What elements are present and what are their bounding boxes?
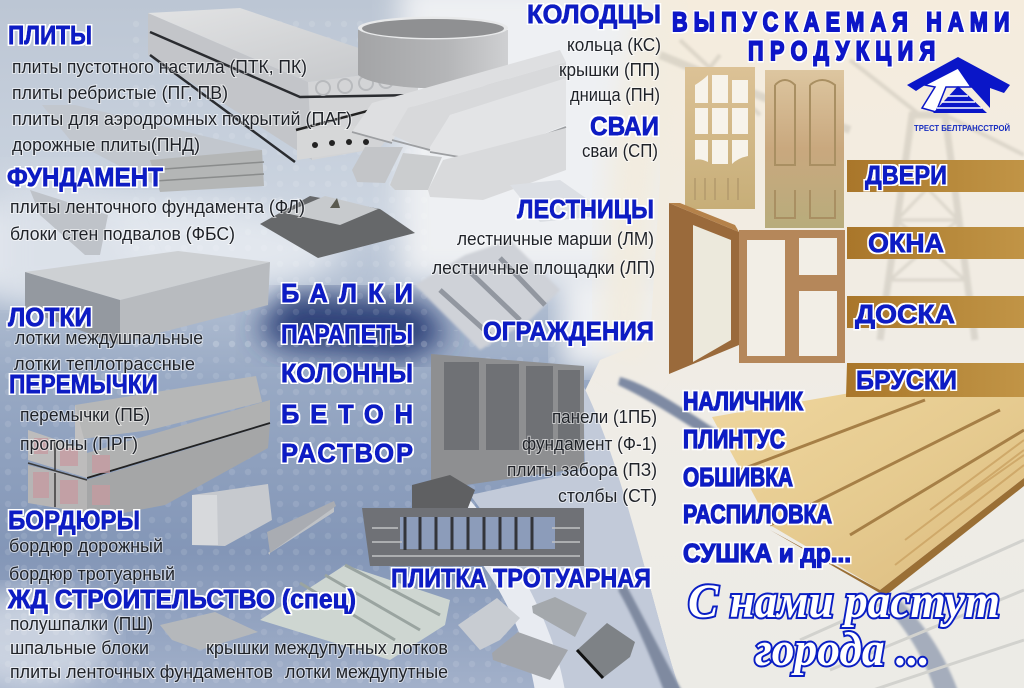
list: перемычки (ПБ) [20, 405, 150, 425]
heading: БОРДЮРЫ [8, 507, 140, 535]
image: panel door [765, 70, 844, 228]
list: плиты ленточных фундаментов [10, 662, 273, 682]
center product list: ПАРАПЕТЫ [281, 321, 413, 349]
center product list [281, 280, 413, 468]
bar: бруски: БРУСКИ [856, 367, 957, 395]
list: дорожные плиты(ПНД) [12, 135, 200, 155]
title [672, 8, 1010, 67]
bar: окна [847, 227, 1024, 259]
section: плиты [8, 22, 352, 155]
image: hollow core slabs [148, 8, 420, 162]
wood products list [683, 386, 851, 568]
heading: ОГРАЖДЕНИЯ [483, 318, 654, 346]
image: curb stones [192, 484, 336, 555]
center product list: КОЛОННЫ [281, 360, 413, 388]
list: лотки междупутные [285, 662, 448, 682]
heading: ФУНДАМЕНТ [7, 164, 163, 192]
center product list: РАСТВОР [281, 440, 413, 468]
list [14, 328, 203, 374]
list: панели (1ПБ) [552, 407, 657, 427]
section: перемычки [9, 371, 158, 454]
list: столбы (СТ) [558, 486, 657, 506]
section: лотки [8, 304, 203, 374]
bar: бруски [846, 363, 1024, 397]
section: колодцы [527, 1, 661, 105]
center product list: БЕТОН [281, 401, 413, 429]
list: лотки теплотрассные [14, 354, 195, 374]
slogan [688, 575, 1000, 676]
section: бордюры [8, 507, 175, 584]
image: lotok trough [25, 251, 270, 345]
image: foundation block [260, 196, 415, 258]
list: днища (ПН) [570, 85, 660, 105]
list: кольца (КС) [567, 35, 661, 55]
bar: двери: ДВЕРИ [865, 162, 947, 190]
section: лестницы [432, 196, 655, 278]
slogan: С нами растут [688, 575, 1000, 628]
image: stacked lintels [28, 376, 270, 520]
bar: окна: ОКНА [868, 230, 944, 258]
list [9, 536, 175, 584]
list [432, 229, 655, 278]
image: road slabs [30, 105, 264, 255]
image: concrete well ring [358, 16, 508, 88]
list: блоки стен подвалов (ФБС) [10, 224, 235, 244]
image: wooden boards [712, 393, 1024, 596]
list: прогоны (ПРГ) [20, 434, 138, 454]
heading: КОЛОДЦЫ [527, 1, 661, 29]
list [10, 197, 305, 244]
image: decorative fence [362, 508, 584, 566]
list: плиты ребристые (ПГ, ПВ) [12, 83, 228, 103]
list: лестничные площадки (ЛП) [432, 258, 655, 278]
wood products list: ОБШИВКА [683, 462, 793, 492]
image: glazed door [685, 67, 755, 209]
list: лестничные марши (ЛМ) [457, 229, 654, 249]
list: плиты для аэродромных покрытий (ПАГ) [12, 109, 352, 129]
bar: доска: ДОСКА [855, 301, 955, 329]
title: ПРОДУКЦИЯ [748, 37, 935, 67]
heading: ПЛИТЫ [8, 22, 92, 50]
list: плиты пустотного настила (ПТК, ПК) [12, 57, 307, 77]
slogan: города ... [755, 623, 930, 676]
list: шпальные блоки [10, 638, 149, 658]
list: лотки междушпальные [15, 328, 203, 348]
heading: ПЕРЕМЫЧКИ [9, 371, 158, 399]
list: бордюр тротуарный [9, 564, 175, 584]
list [20, 405, 150, 454]
image: open window [669, 203, 739, 374]
bar: доска [847, 296, 1024, 329]
section: сваи [582, 113, 659, 161]
list: крышки междупутных лотков [206, 638, 448, 658]
wood products list: РАСПИЛОВКА [683, 499, 832, 529]
list: полушпалки (ПШ) [10, 614, 153, 634]
list: плиты ленточного фундамента (ФЛ) [10, 197, 305, 217]
image: fence panel [412, 354, 584, 515]
list: крышки (ПП) [559, 60, 660, 80]
list [10, 614, 448, 682]
logo [907, 57, 1010, 133]
list: плиты забора (ПЗ) [507, 460, 657, 480]
list: бордюр дорожный [9, 536, 163, 556]
image: staircase [415, 180, 610, 350]
background: right cream panel with crane [445, 0, 1024, 691]
heading: ЖД СТРОИТЕЛЬСТВО (спец) [7, 586, 356, 614]
center product list: БАЛКИ [281, 280, 413, 308]
list [507, 407, 657, 506]
bar: двери [847, 160, 1024, 192]
wood products list: ПЛИНТУС [683, 424, 785, 454]
image: double window [739, 230, 845, 363]
section: жд строительство [7, 586, 448, 682]
list: сваи (СП) [582, 141, 658, 161]
section: ограждения [483, 318, 657, 506]
list: фундамент (Ф-1) [522, 434, 657, 454]
heading: СВАИ [590, 113, 659, 141]
list [559, 35, 661, 105]
heading: ЛОТКИ [8, 304, 92, 332]
section: фундамент [7, 164, 305, 244]
image: paving tiles [458, 597, 635, 680]
image: railway blocks [160, 565, 450, 660]
wood products list: НАЛИЧНИК [683, 386, 803, 416]
image: concrete piles [352, 50, 566, 200]
wood products list: СУШКА и др... [683, 538, 851, 568]
logo caption: ТРЕСТ БЕЛТРАНССТРОЙ [914, 122, 1010, 133]
heading: плитка тротуарная: ПЛИТКА ТРОТУАРНАЯ [391, 565, 651, 593]
list [12, 57, 352, 155]
heading: ЛЕСТНИЦЫ [517, 196, 654, 224]
title: ВЫПУСКАЕМАЯ НАМИ [672, 8, 1010, 38]
